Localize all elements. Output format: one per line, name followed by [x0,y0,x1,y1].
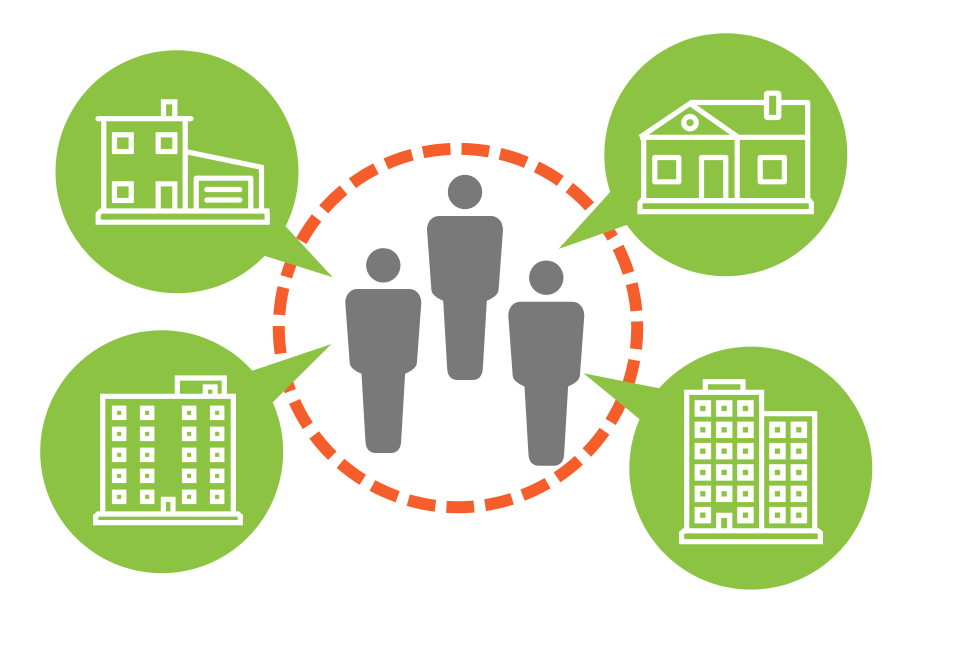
speech bubble: mid-rise apartment block [40,330,331,573]
person: left [345,248,421,453]
speech bubble: detached house with garage [56,50,333,293]
windows [697,403,804,521]
icon: house with garage [98,102,267,222]
icon: high-rise towers [682,382,820,542]
person: centre [427,175,503,380]
person: right [508,260,584,466]
dashed orange ring [272,142,644,514]
speech bubble: high-rise towers [584,347,872,590]
icon: gabled house [640,93,811,212]
windows [114,408,222,502]
speech bubble: gabled house [558,33,847,276]
icon: mid-rise apartment block [96,378,240,523]
